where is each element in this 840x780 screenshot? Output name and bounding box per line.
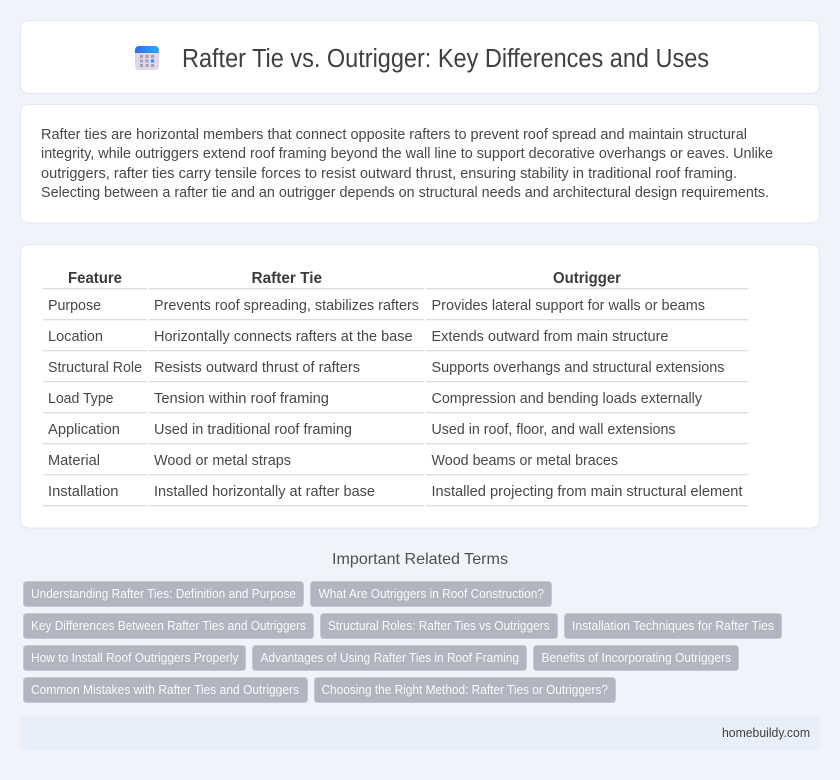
row: purpose [43,298,748,320]
chip [564,614,782,638]
chip: Choosing the Right Method: Rafter Ties or Outriggers? [322,683,608,697]
chip: Understanding Rafter Ties: Definition and Purpose [31,587,296,601]
chip: Structural Roles: Rafter Ties vs Outriggers [328,619,550,633]
row: material: Wood or metal straps [154,453,291,469]
row: application: Used in traditional roof framing [154,422,352,438]
chip: How to Install Roof Outriggers Properly [31,651,239,665]
chip [24,678,308,702]
panel: header [20,20,820,94]
row: load type: Compression and bending loads externally [432,391,703,407]
chip [24,646,246,670]
intro paragraph [41,127,773,201]
chip: Installation Techniques for Rafter Ties [572,619,774,633]
intro paragraph: integrity, while outriggers extend roof framing beyond the wall line to support decorative overhangs or eaves. Unlike [41,146,773,162]
row: material [43,453,748,475]
row: installation [43,484,748,506]
table header: Outrigger [553,270,621,287]
table header: Rafter Tie [252,270,322,287]
row: location: Horizontally connects rafters at the base [154,329,412,345]
icon: calendar [135,46,159,70]
footer [20,716,820,750]
table header [43,270,748,289]
intro paragraph: Rafter ties are horizontal members that connect opposite rafters to prevent roof spread and maintain structural [41,127,747,143]
intro paragraph: Selecting between a rafter tie and an outrigger depends on structural needs and architectural design requirements. [41,185,769,201]
chip: Common Mistakes with Rafter Ties and Outriggers [31,683,299,697]
row: purpose: Purpose [48,298,101,314]
row: application: Application [48,422,120,438]
chip: Key Differences Between Rafter Ties and Outriggers [31,619,306,633]
chip [534,646,738,670]
row: load type: Load Type [48,391,114,407]
table header: Feature [68,270,122,287]
row: material: Wood beams or metal braces [432,453,618,469]
row: installation: Installed horizontally at rafter base [154,484,375,500]
panel: comparison table [20,244,820,528]
chip [24,614,314,638]
heading: related terms: Important Related Terms [332,551,508,568]
row: installation: Installed projecting from main structural element [432,484,742,500]
chip: Advantages of Using Rafter Ties in Roof Framing [260,651,519,665]
chip [310,582,552,606]
chip: Benefits of Incorporating Outriggers [542,651,731,665]
chip [252,646,526,670]
footer site name: homebuildy.com [722,726,810,740]
row: material: Material [48,453,100,469]
row: application [43,422,748,444]
chip [314,678,616,702]
row: location [43,329,748,351]
row: structural role: Resists outward thrust of rafters [154,360,360,376]
row: location: Location [48,329,103,345]
row: load type: Tension within roof framing [154,391,329,407]
panel: related term chips [24,582,782,702]
panel: introduction [20,104,820,223]
row: purpose: Prevents roof spreading, stabilizes rafters [154,298,419,314]
row: location: Extends outward from main structure [432,329,668,345]
chip [24,582,304,606]
row: structural role: Structural Role [48,360,142,376]
row: load type [43,391,748,413]
row: purpose: Provides lateral support for walls or beams [432,298,705,314]
chip: What Are Outriggers in Roof Construction? [318,587,544,601]
row: structural role: Supports overhangs and structural extensions [432,360,724,376]
row: structural role [43,360,748,382]
intro paragraph: outriggers, rafter ties carry tensile forces to resist outward thrust, ensuring stability in traditional roof framing. [41,166,737,182]
row: installation: Installation [48,484,118,500]
chip [320,614,558,638]
row: application: Used in roof, floor, and wall extensions [432,422,676,438]
title: Rafter Tie vs. Outrigger: Key Differences and Uses [182,45,709,73]
